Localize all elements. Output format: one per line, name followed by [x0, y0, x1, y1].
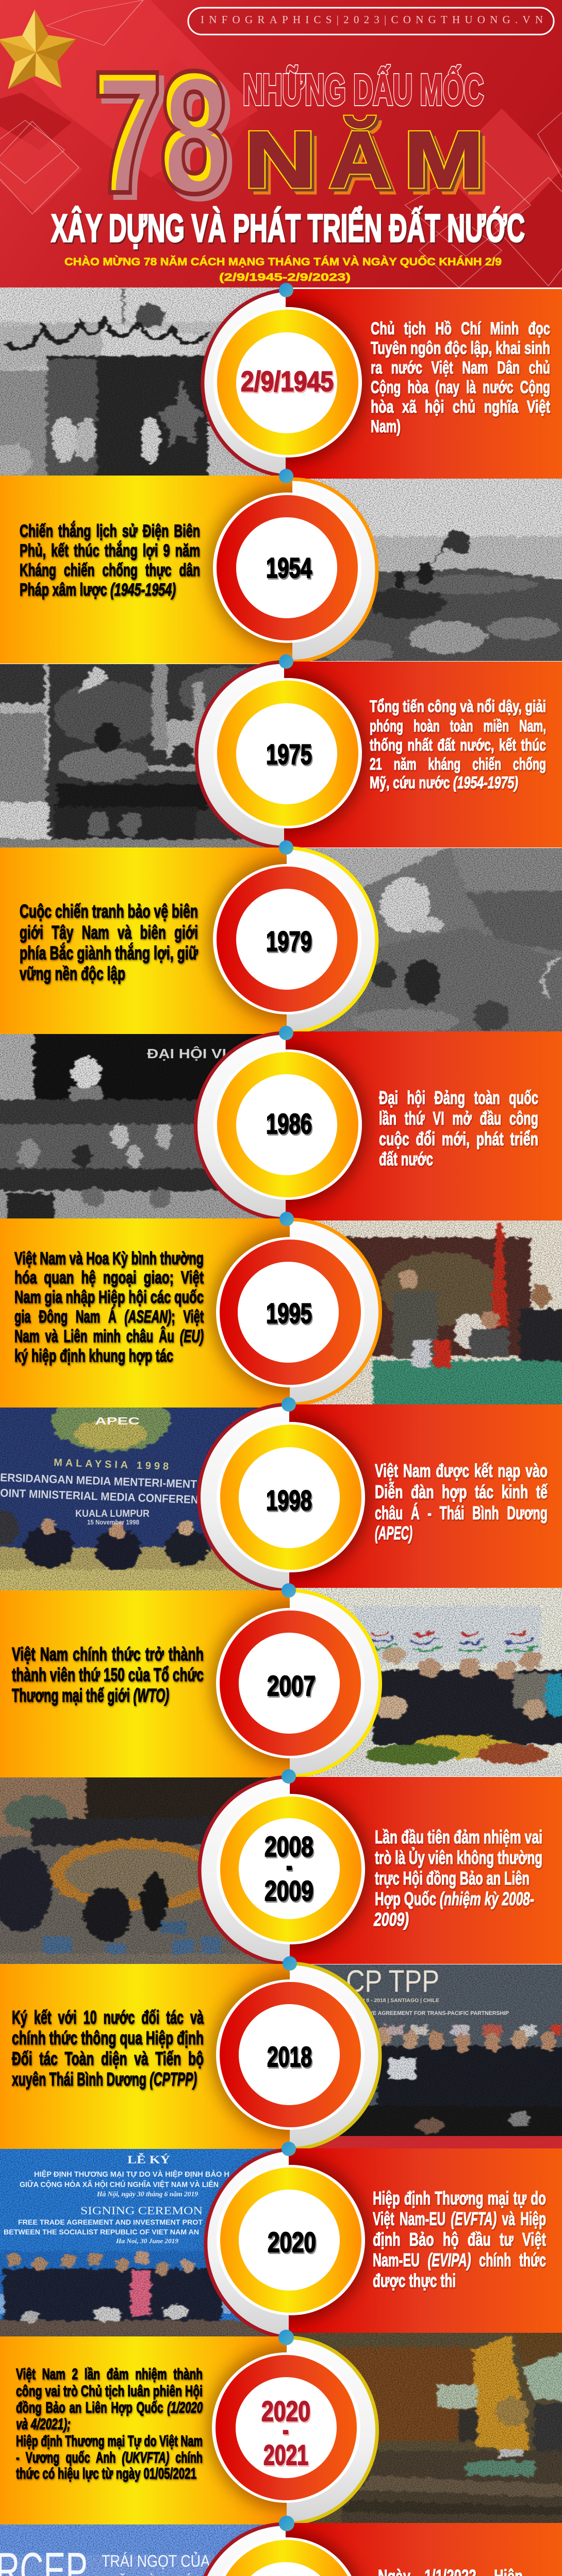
- photo: RCEP signing: [0, 2514, 301, 2576]
- panel: orange background: [0, 1590, 290, 1777]
- photo labels: KUALA LUMPUR: [75, 1509, 150, 1519]
- photo: party congress: [0, 1034, 266, 1218]
- text: Việt Nam chính thức trở thành: [12, 1643, 204, 1665]
- year circle: -: [286, 1850, 292, 1882]
- title: NĂM: N: [246, 117, 319, 207]
- half moon: [196, 2524, 286, 2576]
- title: NĂM: M: [404, 115, 484, 204]
- text: chính thức thông qua Hiệp định: [12, 2027, 204, 2048]
- circle shadow: [210, 1972, 370, 2137]
- photo labels: [0, 1416, 199, 1526]
- text: Hiệp định Thương mại Tự do Việt Nam: [16, 2433, 203, 2450]
- panel: red background: [286, 1031, 562, 1221]
- header background: [0, 0, 562, 287]
- photo labels: VE AGREEMENT FOR TRANS-PACIFIC PARTNERSHIP: [369, 2010, 509, 2016]
- panel: 2008-2009: [0, 1768, 562, 1975]
- half moon: [200, 1777, 290, 1963]
- text: Pháp xâm lược (1945-1954): [20, 580, 176, 600]
- circle shadow: [208, 671, 368, 836]
- subtitle: [64, 256, 502, 283]
- half moon: [292, 479, 377, 662]
- title: NĂM: M: [406, 117, 487, 207]
- year circle: [216, 1237, 365, 1387]
- photo: signing ceremony: [308, 1221, 562, 1404]
- photo labels: 15 November 1998: [87, 1518, 139, 1526]
- circle shadow: [208, 1042, 368, 1207]
- year circle: 2020: [261, 2395, 310, 2427]
- title: NĂM: Ă: [329, 115, 391, 204]
- panel: red background: [289, 1404, 562, 1588]
- panel: 2020: [0, 2139, 562, 2346]
- photo labels: OINT MINISTERIAL MEDIA CONFEREN: [0, 1486, 199, 1506]
- icon: gold star: [0, 9, 76, 89]
- panel: red background: [290, 1777, 562, 1964]
- panel: 1954: [0, 469, 562, 670]
- photo labels: GIỮA CỘNG HÒA XÃ HỘI CHỦ NGHĨA VIỆT NAM VÀ LIÊN: [20, 2180, 219, 2189]
- panel: 2018: [0, 1955, 562, 2149]
- panel: 1975: [0, 654, 562, 859]
- title number: 78: [96, 69, 232, 202]
- year circle: 2020: [268, 2226, 316, 2258]
- text: gia Đông Nam Á (ASEAN); Việt: [14, 1307, 204, 1327]
- text: đất nước: [379, 1148, 433, 1170]
- circle shadow: [207, 857, 367, 1022]
- title: NĂM: N: [244, 115, 316, 204]
- text: công vai trò Chủ tịch luân phiên Hội: [16, 2383, 203, 2400]
- photo: border war: [305, 848, 562, 1031]
- panel: red background: [286, 2523, 562, 2576]
- badge: infographics pill: INFOGRAPHICS|2023|CONGTHUONG.VN: [201, 13, 543, 26]
- panel: 1995: [0, 1210, 562, 1415]
- title: NĂM: N: [244, 115, 316, 204]
- title: NĂM: M: [404, 115, 484, 204]
- year circle: 2/9/1945: [241, 365, 334, 397]
- photo labels: CP TPP: [346, 1964, 439, 1998]
- photo: UN General Assembly: [272, 2323, 562, 2532]
- text: [14, 1249, 204, 1366]
- photo labels: APEC: [95, 1416, 140, 1427]
- text: Thương mại thế giới (WTO): [12, 1685, 169, 1706]
- photo labels: [346, 1964, 509, 2016]
- year circle: 1979: [266, 925, 312, 957]
- text: [373, 2188, 546, 2291]
- photo: APEC conference: [0, 1408, 271, 1590]
- circle shadow: [210, 1601, 370, 1766]
- title number: 78: 78: [94, 39, 227, 226]
- text: Phủ, kết thúc thắng lợi 9 năm: [20, 541, 200, 561]
- text: Cuộc chiến tranh bảo vệ biên: [20, 901, 198, 922]
- half moon: [196, 1033, 286, 1219]
- title: NĂM: M: [409, 121, 489, 210]
- panel: orange background: [0, 476, 292, 664]
- subtitle: (2/9/1945-2/9/2023): [219, 272, 351, 283]
- text: và 4/2021);: [16, 2416, 71, 2433]
- year circle: [213, 678, 362, 828]
- year circle: [213, 493, 361, 643]
- photo labels: [0, 2542, 210, 2576]
- photo labels: LỄ KÝ: [127, 2153, 170, 2166]
- panel: 1979: [0, 839, 562, 1041]
- circle shadow: [210, 1230, 370, 1395]
- text: Việt Nam 2 lần đảm nhiệm thành: [16, 2366, 203, 2383]
- half moon: [206, 2149, 289, 2337]
- half moon: [287, 2337, 377, 2523]
- panel: 2/9/1945: [0, 279, 562, 486]
- text: Việt Nam và Hoa Kỳ bình thường: [14, 1249, 204, 1268]
- panel: 1998: [0, 1392, 562, 1602]
- text: ký hiệp định khung hợp tác: [14, 1346, 173, 1366]
- circle shadow: [211, 1787, 371, 1952]
- text: Chiến thắng lịch sử Điện Biên: [20, 521, 200, 541]
- text: hóa quan hệ ngoại giao; Việt: [14, 1268, 204, 1287]
- text: [20, 521, 200, 600]
- half moon: [203, 290, 286, 476]
- year circle: 2008: [265, 1831, 313, 1862]
- year circle: 1986: [266, 1108, 312, 1140]
- photo: CPTPP signing: [276, 1955, 562, 2146]
- photo: Dien Bien Phu: [307, 479, 562, 661]
- title number: 78: 78: [100, 44, 233, 231]
- panel: red background: [284, 662, 562, 848]
- circle shadow: [206, 2345, 366, 2510]
- year circle: [212, 2352, 360, 2503]
- text: - Vương quốc Anh (UKVFTA) chính: [16, 2449, 203, 2466]
- photo labels: Hà Nội, ngày 30 tháng 6 năm 2019: [96, 2191, 198, 2198]
- title: NĂM: N: [249, 121, 321, 210]
- timeline connector dots: [275, 283, 297, 2576]
- title number: 78: 78: [94, 39, 227, 226]
- half moon: [196, 662, 284, 848]
- photo labels: H 8 - 2018 | SANTIAGO | CHILE: [361, 1998, 439, 2004]
- text: giới Tây Nam và biên giới: [20, 922, 198, 943]
- photo labels: SIGNING CEREMON: [80, 2204, 203, 2217]
- year circle: [213, 307, 362, 457]
- text: Mỹ, cứu nước (1954-1975): [370, 773, 518, 792]
- panel: 2022: [0, 2514, 562, 2576]
- circle shadow: [208, 300, 368, 465]
- text: Nam gia nhập Hiệp hội các quốc: [14, 1287, 204, 1307]
- year circle: [217, 2165, 365, 2315]
- year circle: 2009: [265, 1875, 313, 1907]
- half moon: [290, 1590, 380, 1776]
- half moon: [287, 848, 377, 1032]
- panel: red background: [286, 289, 562, 479]
- half moon: [290, 1963, 380, 2149]
- photo labels: [4, 2153, 229, 2245]
- year circle: 2018: [267, 2041, 312, 2073]
- year circle: [217, 1422, 365, 1572]
- year circle: [212, 2537, 361, 2576]
- year circle: [213, 864, 361, 1014]
- year circle: 1995: [266, 1297, 312, 1329]
- text: xuyên Thái Bình Dương (CPTPP): [12, 2069, 197, 2090]
- panel: red background: [289, 2148, 562, 2333]
- half moon: [290, 1219, 380, 1404]
- text: Nam và Liên minh châu Âu (EU): [14, 1327, 204, 1346]
- photo labels: FREE TRADE AGREEMENT AND INVESTMENT PROT: [18, 2218, 203, 2226]
- text: vững nền độc lập: [20, 963, 125, 984]
- photo: tank at the palace gate: [0, 664, 267, 848]
- decorative red strip: [290, 2136, 562, 2149]
- text: [12, 1643, 204, 1706]
- text: [370, 697, 546, 792]
- text: Ký kết với 10 nước đối tác và: [12, 2007, 204, 2028]
- subtitle: CHÀO MỪNG 78 NĂM CÁCH MẠNG THÁNG TÁM VÀ NGÀY QUỐC KHÁNH 2/9: [64, 256, 502, 268]
- title: NĂM: Ă: [334, 121, 396, 210]
- text: Nam): [371, 417, 401, 436]
- photo labels: BETWEEN THE SOCIALIST REPUBLIC OF VIET NAM AN: [4, 2228, 199, 2236]
- panel: 1986: [0, 1023, 562, 1228]
- year circle: [213, 1049, 362, 1200]
- text: [373, 1826, 542, 1930]
- text: phía Bắc giành thắng lợi, giữ: [20, 942, 199, 963]
- text: đồng Bảo an Liên Hợp Quốc (1/2020: [16, 2399, 203, 2416]
- photo: WTO accession: [295, 1588, 562, 1776]
- text: [12, 2007, 204, 2090]
- text: [16, 2366, 203, 2482]
- year circle: 1954: [266, 552, 312, 584]
- badge: infographics pill: [188, 8, 554, 35]
- panel: orange background: [0, 1964, 290, 2149]
- photo labels: HIỆP ĐỊNH THƯƠNG MẠI TỰ DO VÀ HIỆP ĐỊNH BẢO H: [34, 2170, 229, 2179]
- year circle: -: [283, 2414, 289, 2446]
- panel: orange background: [0, 1218, 290, 1408]
- text: [379, 1087, 538, 1170]
- year circle: [216, 1979, 365, 2130]
- year circle: 1975: [266, 738, 312, 770]
- photo: UN Security Council: [0, 1768, 305, 1975]
- circle shadow: [211, 2158, 371, 2323]
- title number: 78: 78: [98, 44, 232, 231]
- photo: EVFTA signing: [0, 2139, 305, 2346]
- circle shadow: [206, 2530, 366, 2576]
- text: [20, 901, 199, 984]
- circle shadow: [207, 485, 367, 650]
- title: NĂM: Ă: [329, 115, 391, 204]
- title: NĂM: [244, 115, 489, 210]
- text: được thực thi: [373, 2270, 456, 2291]
- year circle: [216, 1608, 365, 1758]
- year circle: 1998: [266, 1484, 312, 1516]
- photo labels: ERSIDANGAN MEDIA MENTERI-MENT: [0, 1471, 197, 1490]
- photo: declaration of independence: [0, 287, 279, 476]
- text: (APEC): [375, 1522, 412, 1544]
- text: thức có hiệu lực từ ngày 01/05/2021: [16, 2465, 196, 2482]
- year circle: 2021: [263, 2439, 308, 2471]
- photo label: ĐẠI HỘI VI: [147, 1046, 226, 1061]
- year circle: 2007: [267, 1670, 316, 1702]
- circle shadow: [211, 1415, 371, 1580]
- panel: orange background: [0, 848, 287, 1034]
- photo labels: TRÁI NGỌT CỦA: [102, 2552, 210, 2570]
- photo labels: MALAYSIA 1998: [54, 1457, 169, 1472]
- text: 2009): [373, 1909, 409, 1930]
- text: thành viên thứ 150 của Tổ chức: [12, 1664, 204, 1685]
- panel: 2007: [0, 1578, 562, 1786]
- text: Đối tác Toàn diện và Tiến bộ: [12, 2048, 204, 2069]
- text: Kháng chiến chống thực dân: [20, 561, 200, 580]
- title: NĂM: Ă: [332, 117, 393, 207]
- year circle: [217, 1794, 365, 1944]
- photo labels: Ha Noi, 30 June 2019: [115, 2237, 179, 2245]
- panel: orange background: [0, 2336, 287, 2524]
- panel: 2020-2021: [0, 2323, 562, 2532]
- text: [375, 1460, 548, 1544]
- text: [371, 319, 550, 436]
- half moon: [199, 1404, 289, 1590]
